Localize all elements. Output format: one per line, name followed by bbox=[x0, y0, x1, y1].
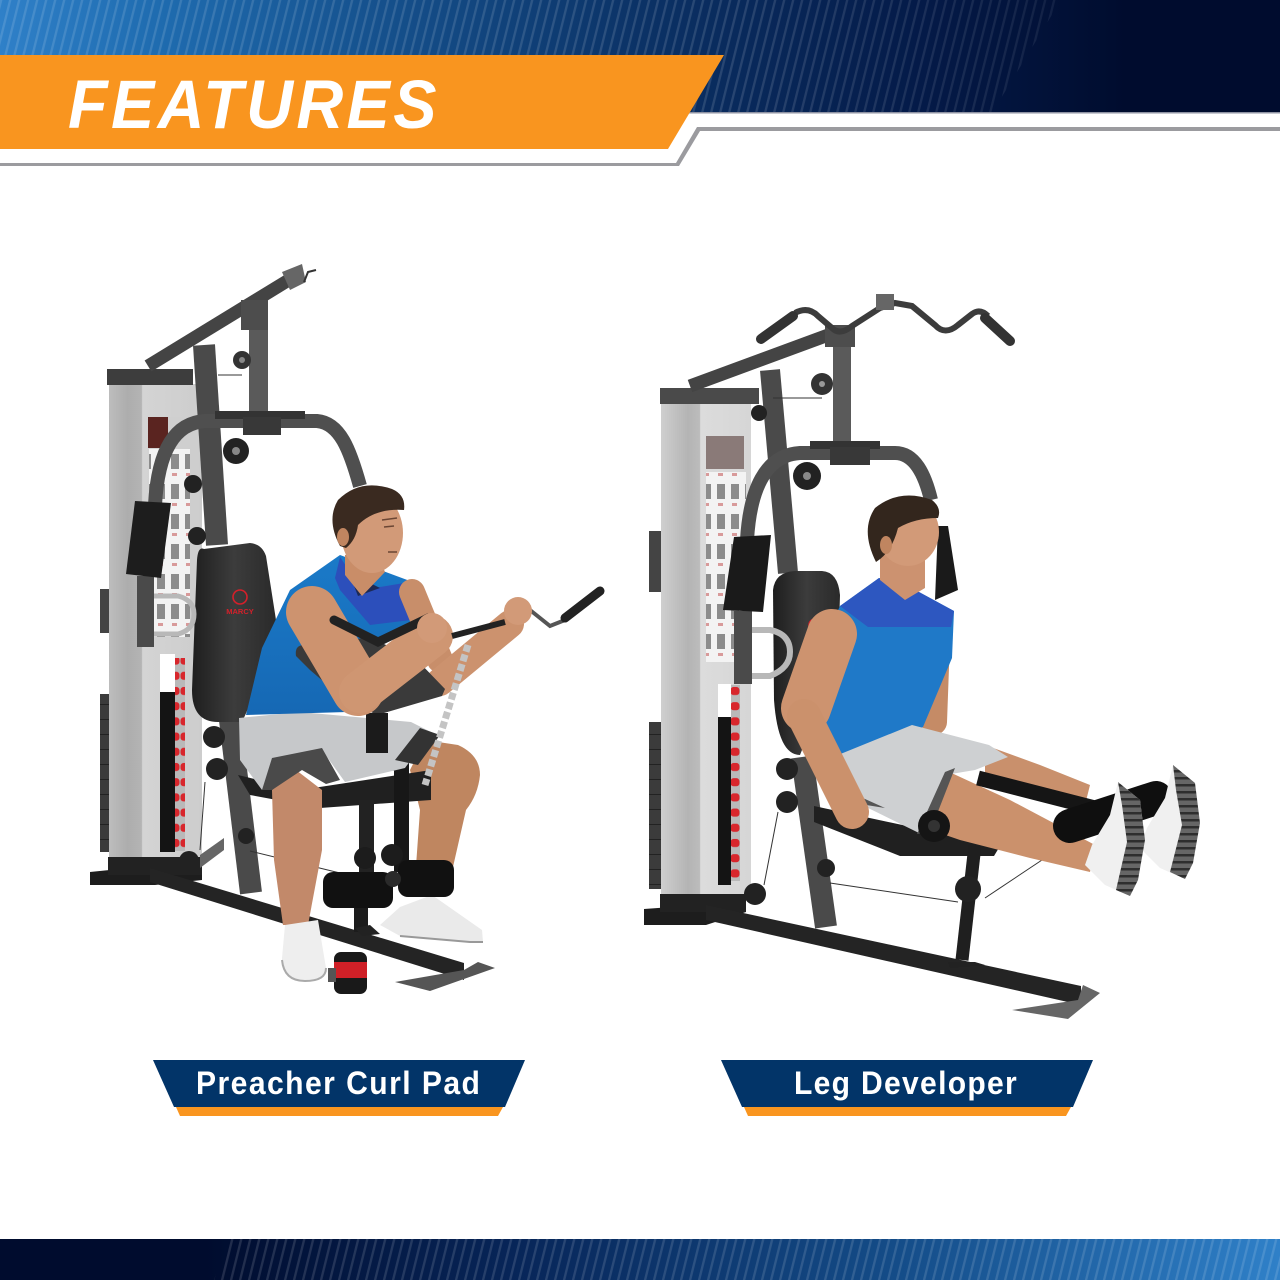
label: Preacher Curl Pad: Preacher Curl Pad bbox=[196, 1065, 480, 1101]
man: shorts bbox=[831, 725, 1008, 834]
seat and leg developer bbox=[238, 750, 454, 936]
man: shoes bbox=[1085, 765, 1200, 896]
man: torso bbox=[246, 555, 411, 715]
man: shorts bbox=[239, 712, 440, 790]
heading banner: FEATURES: FEATURES bbox=[68, 66, 436, 143]
gym frame right bbox=[644, 325, 1100, 1019]
label: Leg Developer bbox=[721, 1060, 1093, 1116]
seat back bbox=[179, 543, 340, 893]
seat back: MARCY bbox=[226, 607, 254, 616]
illustration: leg developer on home gym bbox=[644, 294, 1200, 1019]
curl bar bbox=[334, 591, 600, 643]
man: near arm bbox=[804, 634, 852, 812]
heading banner: FEATURES bbox=[0, 55, 724, 149]
man: far arm bbox=[412, 592, 510, 682]
man: near leg bbox=[925, 770, 1095, 872]
top header band bbox=[0, 0, 1280, 114]
bottom footer band bbox=[0, 1239, 1280, 1280]
man: torso bbox=[824, 578, 954, 762]
man: head bbox=[332, 485, 404, 596]
man: near arm bbox=[312, 612, 432, 692]
grey header rule bbox=[0, 127, 1280, 166]
preacher curl pad bbox=[296, 637, 445, 753]
man: head bbox=[868, 496, 939, 600]
lat bar bbox=[761, 294, 1010, 341]
man: near leg and shoe bbox=[272, 770, 326, 981]
arm pad and handle bbox=[126, 501, 194, 647]
ankle strap bbox=[328, 952, 367, 994]
man: far leg bbox=[985, 745, 1090, 805]
seat back bbox=[744, 571, 840, 927]
man: arm behind bbox=[934, 640, 937, 722]
label: Preacher Curl Pad bbox=[153, 1060, 525, 1116]
weight tower bbox=[649, 388, 759, 894]
chain bbox=[425, 645, 468, 785]
man: far leg and shoe bbox=[380, 740, 483, 942]
weight tower bbox=[100, 369, 202, 857]
illustration: preacher curl on home gym bbox=[90, 264, 600, 994]
label: Leg Developer: Leg Developer bbox=[794, 1065, 1017, 1101]
bench and column bbox=[814, 806, 1045, 968]
leg developer roller bbox=[918, 778, 1156, 842]
gym frame left bbox=[90, 264, 495, 991]
arm pads and handle bbox=[723, 526, 958, 684]
